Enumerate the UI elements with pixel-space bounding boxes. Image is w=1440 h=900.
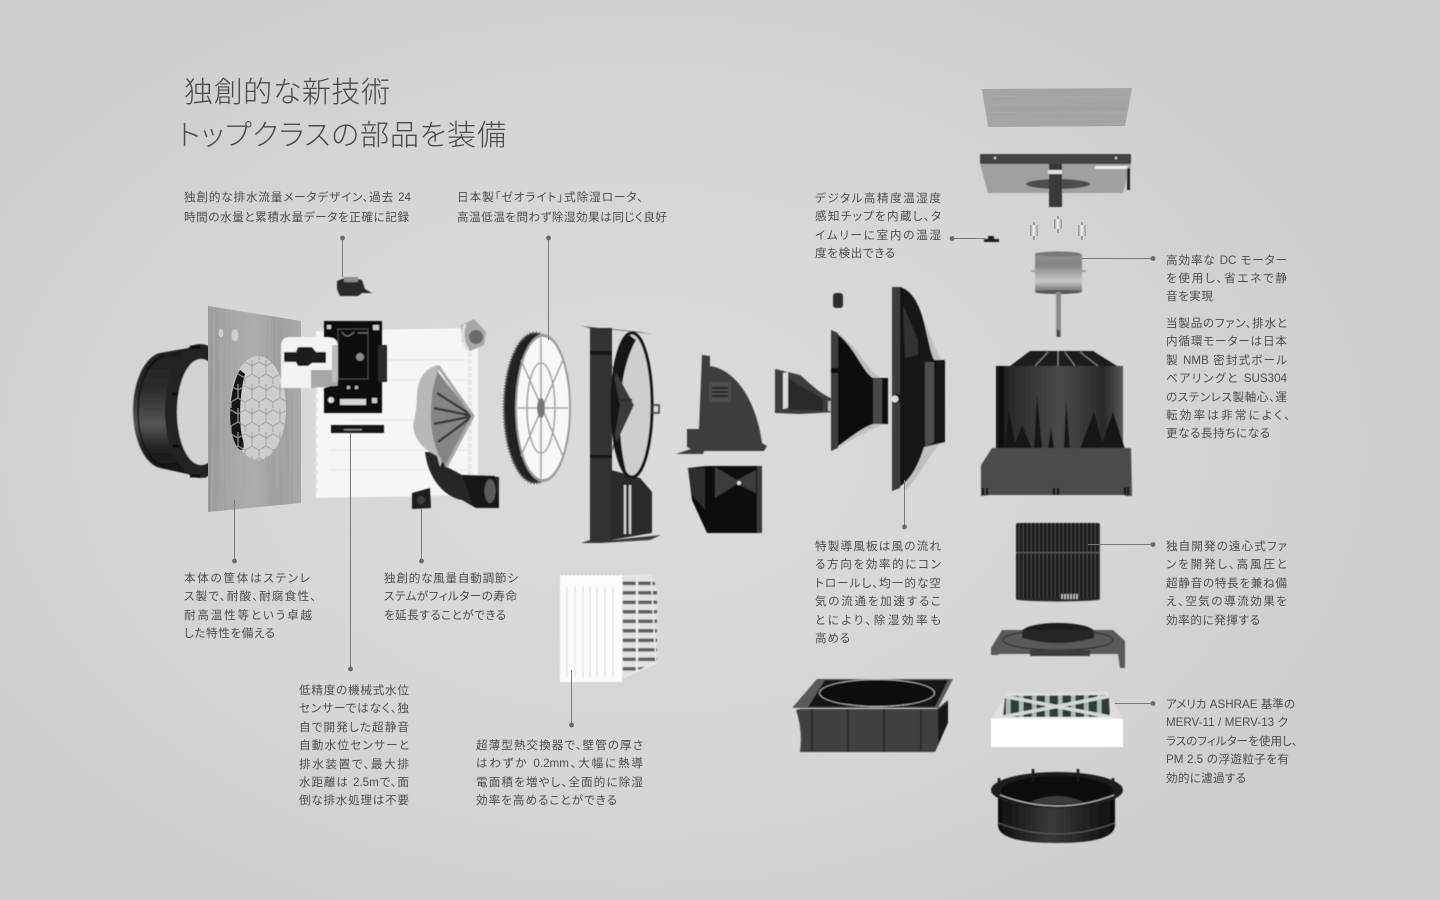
component: centrifugal blower cone [413, 365, 499, 508]
component: centrifugal fan [1016, 523, 1100, 602]
leader line: filter [1115, 701, 1155, 706]
leader line: fan [1088, 542, 1155, 547]
component: ultra-thin heat exchanger [560, 575, 657, 682]
text: centrifugal fan: ンを開発し、高風圧と [1166, 558, 1287, 571]
component: bottom ring [991, 769, 1123, 843]
text: air guide: 気の流通を加速するこ [815, 595, 941, 608]
text: water level sensor: 自で開発した超静音 [299, 721, 409, 734]
text: heat exchanger: 効率を高めることができる [476, 794, 617, 807]
text: rotor: 高温低温を問わず除湿効果は同じく良好 [457, 211, 667, 224]
leader line: large air guide [902, 480, 907, 529]
text: air guide [815, 540, 941, 645]
text: stainless body [184, 572, 316, 640]
text: air guide: る方向を効率的にコン [815, 558, 941, 571]
leader line: plate [232, 500, 237, 563]
text: rotor [457, 191, 667, 224]
component: three motor mounts [1030, 216, 1086, 240]
text: heat exchanger [476, 739, 643, 807]
text: heat exchanger: 超薄型熱交換器で、壁管の厚さ [476, 739, 643, 752]
text: MERV filter: ラスのフィルターを使用し、 [1166, 735, 1298, 748]
text: stainless body: 耐高温性等という卓越 [184, 609, 312, 622]
text: humidity chip: 感知チップを内蔵し、タ [815, 210, 941, 223]
component: top flow meter [337, 277, 372, 296]
component: water level sensor box [281, 337, 338, 388]
component: large air guide [892, 287, 945, 491]
text: heat exchanger: 電面積を増やし、全面的に除湿 [476, 776, 643, 789]
text: air volume control: 独創的な風量自動調節シ [384, 572, 518, 585]
leader line: servo [419, 509, 424, 563]
text: humidity chip: 度を検出できる [815, 247, 895, 260]
component: quarter-round duct plate [676, 355, 767, 454]
text: humidity chip: デジタル高精度温湿度 [815, 192, 941, 205]
text: water level sensor [299, 684, 409, 807]
text: stainless body: した特性を備える [184, 627, 275, 640]
text: air guide: 特製導風板は風の流れ [815, 540, 941, 553]
text: air guide: トロールし、均一的な空 [815, 577, 941, 590]
component: funnel duct [775, 369, 836, 414]
title [178, 77, 506, 152]
component: lower black box [792, 679, 953, 752]
text: bearing: 製 NMB 密封式ボール [1166, 354, 1287, 367]
component: small knob [833, 293, 843, 308]
text: bearing: のステンレス製軸心、運 [1166, 391, 1287, 404]
text: water level sensor: 水距離は 2.5mで、面 [299, 776, 409, 789]
component: white heat exchanger panel [316, 328, 478, 498]
text: centrifugal fan [1166, 540, 1287, 627]
text: stainless body: 本体の筐体はステンレ [184, 572, 310, 585]
component: top lid plate [980, 154, 1131, 207]
component: main housing [981, 351, 1132, 496]
text: air guide: 高める [815, 632, 850, 645]
text: bearing: 当製品のファン、排水と [1166, 317, 1287, 330]
leader line: humidity chip [950, 236, 985, 241]
title: 独創的な新技術 [184, 77, 390, 109]
leader line: motor [1082, 256, 1155, 261]
text: DC motor [1166, 254, 1287, 303]
text: centrifugal fan: 独自開発の遠心式ファ [1166, 540, 1287, 553]
component: top filter sheet [982, 88, 1132, 127]
leader line: flow meter [340, 236, 345, 277]
text: centrifugal fan: 効率的に発揮する [1166, 614, 1260, 627]
text: air volume control: を延長することができる [384, 609, 506, 622]
title: トップクラスの部品を装備 [178, 120, 506, 152]
text: flow meter [184, 191, 411, 224]
leader line: water sensor [348, 433, 353, 671]
text: bearing [1166, 317, 1290, 440]
component: DC motor [1031, 252, 1086, 337]
text: air guide: とにより、除湿効率も [815, 614, 941, 627]
component: small sensor bar [331, 425, 384, 433]
text: MERV filter [1166, 698, 1298, 785]
component: collar plate [991, 623, 1125, 668]
text: DC motor: を使用し、省エネで静 [1166, 272, 1287, 285]
text: heat exchanger: はわずか 0.2mm、大幅に熱導 [476, 757, 643, 770]
text: humidity chip: イムリーに室内の温湿 [815, 229, 941, 242]
text: air volume control: ステムがフィルターの寿命 [384, 590, 517, 603]
text: MERV filter: PM 2.5 の浮遊粒子を有 [1166, 753, 1289, 766]
component: stainless steel plate with honeycomb [208, 306, 301, 512]
text: water level sensor: 低精度の機械式水位 [299, 684, 409, 697]
text: centrifugal fan: え、空気の導流効果を [1166, 595, 1287, 608]
text: centrifugal fan: 超静音の特長を兼ね備 [1166, 577, 1287, 590]
component: black control board [324, 321, 387, 413]
leader line: heat exchanger [569, 670, 574, 727]
text: water level sensor: 自動水位センサーと [299, 739, 409, 752]
leader line: rotor [546, 236, 551, 340]
component: MERV filter [991, 692, 1123, 747]
text: MERV filter: MERV-11 / MERV-13 ク [1166, 716, 1288, 729]
component: middle air guide [831, 330, 888, 451]
text: air volume control [384, 572, 518, 622]
text: bearing: 内循環モーターは日本 [1166, 335, 1287, 348]
text: water level sensor: 排水装置で、最大排 [299, 758, 409, 771]
text: humidity chip [815, 192, 941, 260]
component: desiccant rotor wheel [504, 333, 571, 483]
component: small black servo [412, 488, 431, 509]
text: stainless body: ス製で、耐酸、耐腐食性、 [184, 590, 316, 603]
text: bearing: 転効率は非常によく、 [1166, 409, 1290, 422]
component: small gear [461, 319, 486, 351]
text: bearing: 更なる長持ちになる [1166, 427, 1270, 440]
component: humidity sensor chip [984, 236, 999, 242]
text: water level sensor: 倒な排水処理は不要 [299, 794, 409, 807]
text: water level sensor: センサーではなく、独 [299, 702, 409, 715]
text: DC motor: 音を実現 [1166, 290, 1213, 303]
text: flow meter: 独創的な排水流量メータデザイン、過去 24 [184, 191, 411, 204]
text: DC motor: 高効率な DC モーター [1166, 254, 1287, 266]
text: MERV filter: 効的に濾過する [1166, 772, 1246, 785]
text: MERV filter: アメリカ ASHRAE 基準の [1166, 698, 1295, 711]
component: left intake ring [133, 344, 235, 478]
text: bearing: ベアリングと SUS304 [1166, 372, 1287, 385]
text: flow meter: 時間の水量と累積水量データを正確に記録 [184, 211, 409, 224]
text: rotor: 日本製「ゼオライト」式除湿ロータ、 [457, 191, 643, 204]
component: circular fan frame [581, 326, 661, 543]
component: black duct block [688, 466, 762, 533]
